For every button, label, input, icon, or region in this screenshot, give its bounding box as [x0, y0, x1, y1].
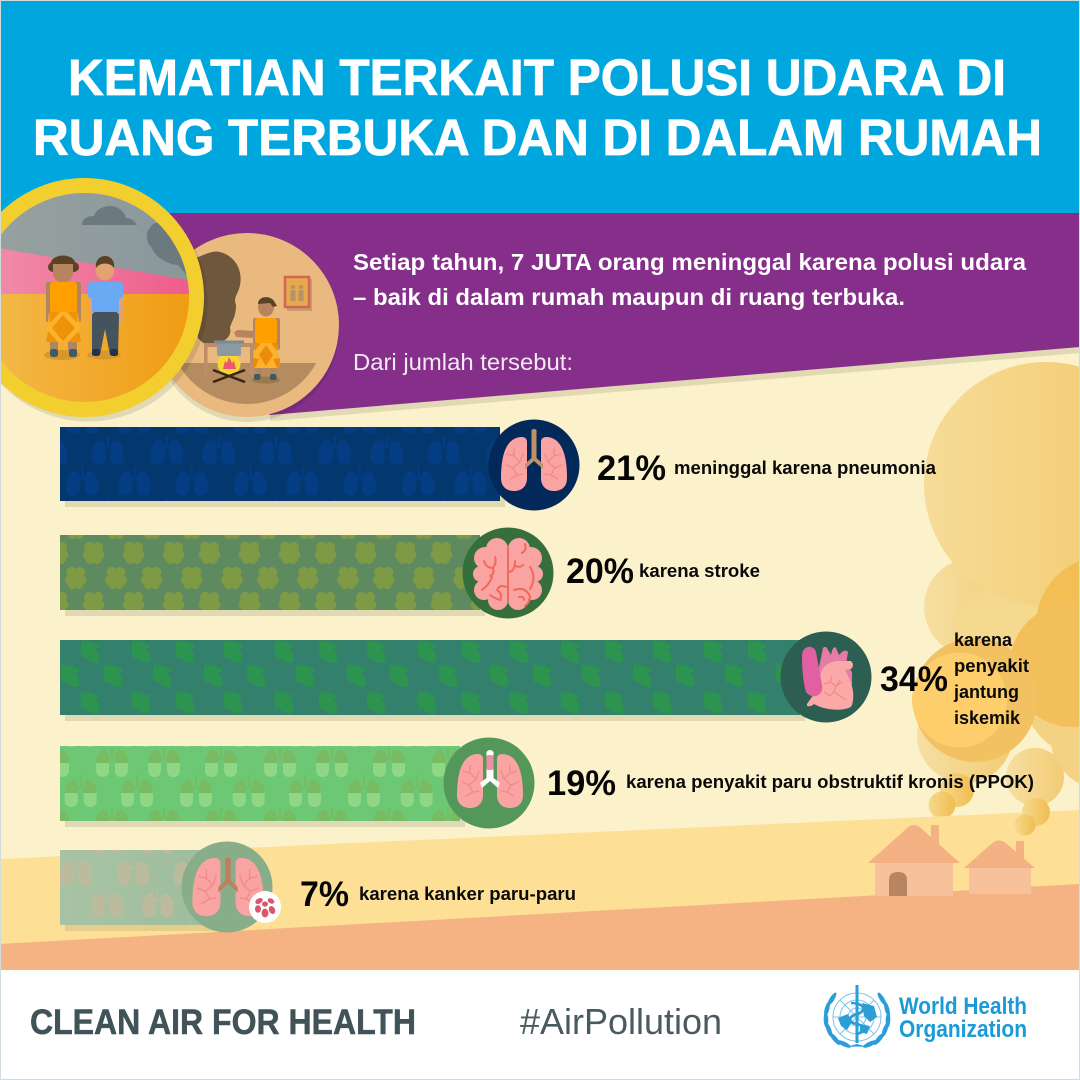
- stat: 19 percent: karena penyakit paru obstruktif kronis (PPOK): [626, 772, 1034, 792]
- stat: 34 percent: [880, 630, 1029, 728]
- header band: [0, 0, 1080, 213]
- stat: 34 percent: 34%: [880, 660, 948, 699]
- figure: woman outdoors: [44, 256, 81, 360]
- stat: 7 percent: [300, 875, 576, 914]
- stat: 7 percent: karena kanker paru-paru: [359, 884, 576, 904]
- intro text: [353, 249, 1026, 375]
- icon: lungs with cancer cells: [182, 842, 281, 932]
- smoke clouds: [912, 362, 1080, 818]
- stat: 34 percent: jantung: [953, 682, 1019, 702]
- title: RUANG TERBUKA DAN DI DALAM RUMAH: [33, 109, 1042, 166]
- bar: pneumonia: [60, 420, 580, 510]
- WHO wordmark: World Health: [899, 993, 1027, 1020]
- intro text: Setiap tahun, 7 JUTA orang meninggal karena polusi udara: [353, 249, 1026, 275]
- illustration: outdoor couple circle: [0, 178, 208, 422]
- footer band: [0, 970, 1080, 1080]
- WHO wordmark: Organization: [899, 1016, 1027, 1043]
- intro text: Dari jumlah tersebut:: [353, 349, 573, 375]
- house smoke puffs: [1014, 798, 1050, 836]
- stat: 20 percent: karena stroke: [639, 561, 760, 581]
- stat: 34 percent: penyakit: [954, 656, 1029, 676]
- stat: 20 percent: 20%: [566, 552, 634, 591]
- purple banner shadow: [270, 347, 1080, 421]
- stat: 19 percent: 19%: [547, 764, 616, 803]
- title: KEMATIAN TERKAIT POLUSI UDARA DI: [68, 49, 1006, 106]
- bar: stroke: [60, 528, 554, 618]
- icon: house walls and door: [875, 863, 1031, 896]
- icon: COPD lungs: [444, 738, 534, 828]
- icon: houses: [868, 825, 1035, 868]
- footer slogan: CLEAN AIR FOR HEALTH: [30, 1003, 416, 1042]
- bar: lung cancer: [60, 842, 281, 932]
- bar: COPD: [60, 738, 534, 828]
- icon: cancer cell badge: [249, 891, 281, 923]
- stat: 7 percent: 7%: [300, 875, 349, 914]
- stat: 20 percent: [566, 552, 760, 591]
- icon: heart: [780, 632, 872, 722]
- hillside sand band: [0, 810, 1080, 970]
- figure: man outdoors: [87, 256, 123, 360]
- bar: ischemic heart disease: [60, 632, 872, 722]
- stat: 21 percent: 21%: [597, 449, 666, 488]
- stat: 34 percent: iskemik: [954, 708, 1021, 728]
- WHO wordmark: [899, 993, 1027, 1043]
- WHO logo: [823, 985, 1027, 1049]
- icon: brain: [462, 528, 554, 618]
- stat: 34 percent: karena: [954, 630, 1013, 650]
- icon: lungs: [488, 420, 580, 510]
- icon: WHO emblem: [823, 985, 891, 1049]
- ground: [0, 884, 1080, 970]
- illustration: indoor cooking circle: [155, 233, 340, 422]
- stat: 19 percent: [547, 764, 1034, 803]
- purple banner: [150, 213, 1080, 415]
- stat: 21 percent: [597, 449, 937, 488]
- footer hashtag: #AirPollution: [520, 1001, 722, 1042]
- intro text: – baik di dalam rumah maupun di ruang terbuka.: [353, 284, 905, 310]
- stat: 21 percent: meninggal karena pneumonia: [674, 458, 937, 478]
- title: [33, 49, 1042, 166]
